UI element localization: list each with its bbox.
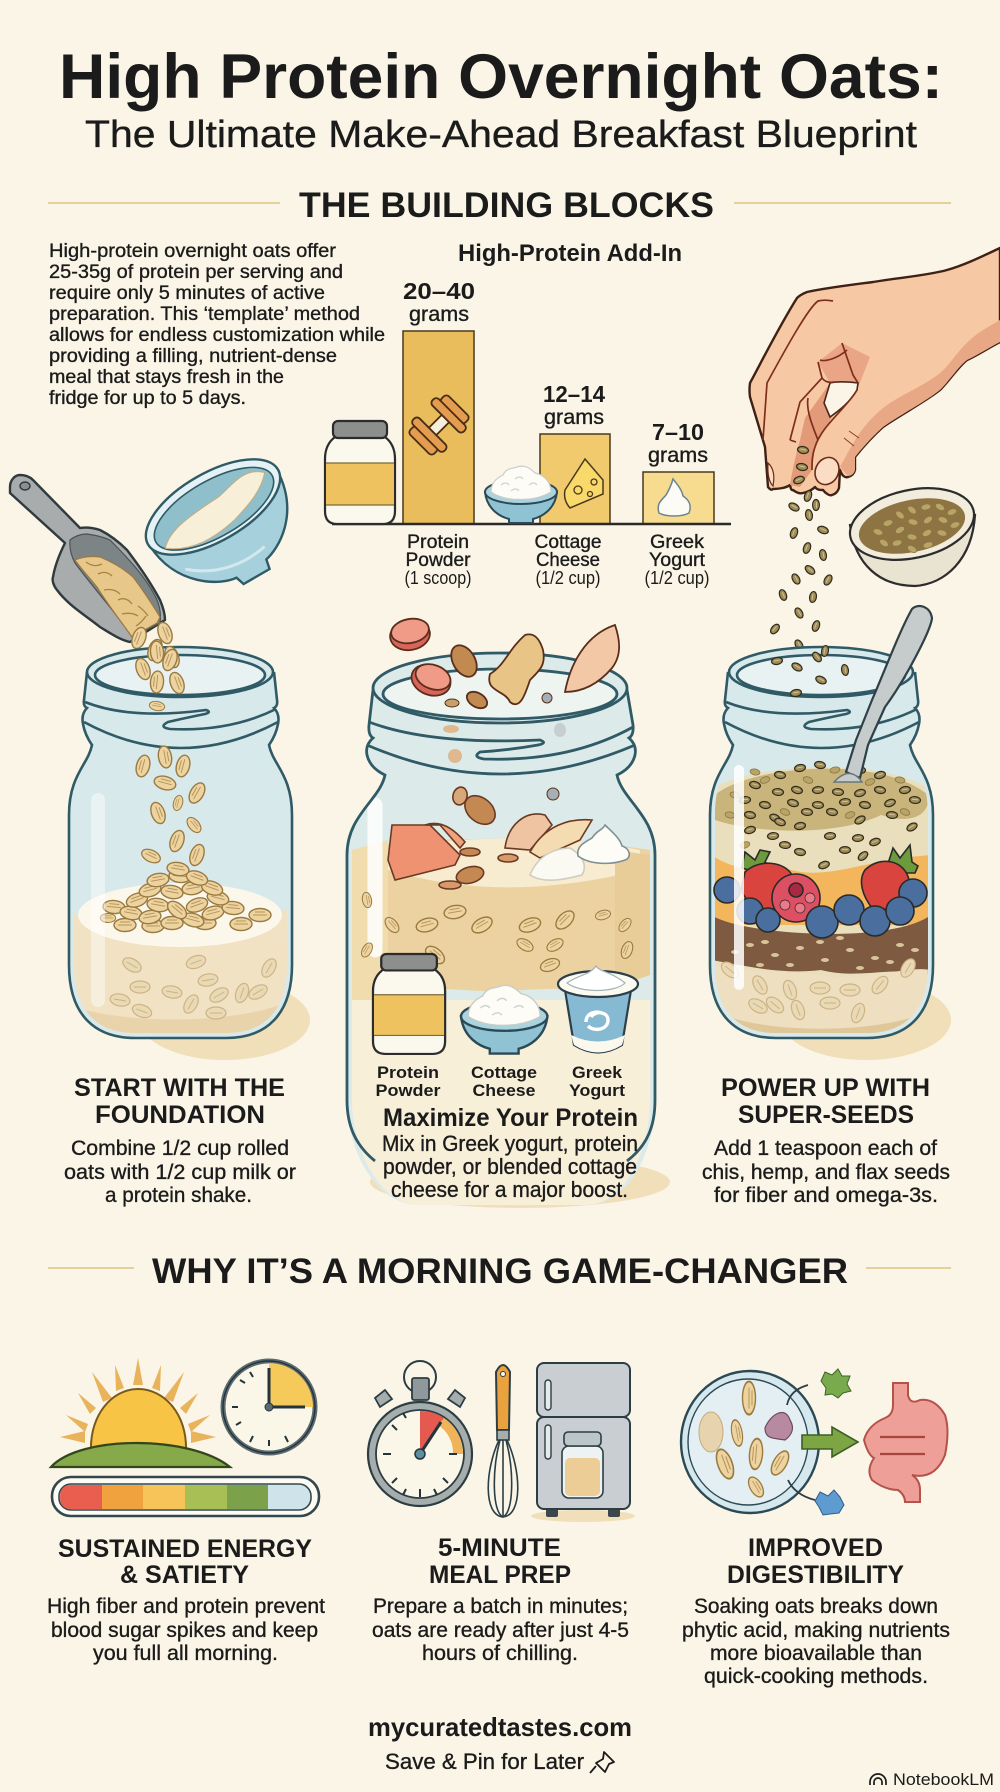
step 1 text: START WITH THE [74, 1074, 285, 1102]
text: maximize your protein: Mix in Greek yogurt, protein [382, 1131, 638, 1156]
footer [368, 1712, 632, 1774]
title: The Ultimate Make-Ahead Breakfast Blueprint [85, 114, 917, 156]
seed layer [725, 761, 921, 870]
falling seeds [769, 490, 834, 651]
oat pile [100, 861, 271, 932]
category labels: Yogurt [649, 550, 706, 571]
benefit 2 text: MEAL PREP [429, 1561, 571, 1589]
jar 1: foundation [69, 647, 292, 1040]
bar: cottage cheese [540, 434, 610, 524]
bar chart: high-protein add-in [325, 240, 731, 588]
falling oats [133, 637, 208, 868]
intro paragraph: preparation. This ‘template’ method [49, 303, 360, 325]
footer: Save & Pin for Later [385, 1749, 584, 1774]
icon: pin [590, 1752, 614, 1773]
icon: protein jar [325, 421, 395, 524]
value labels [403, 278, 708, 467]
benefit 1 text: SUSTAINED ENERGY [58, 1535, 312, 1563]
benefit 3 text: more bioavailable than [710, 1641, 922, 1665]
illustration: hand sprinkling seeds [750, 248, 1000, 495]
step 1 text: Combine 1/2 cup rolled [71, 1136, 289, 1160]
value labels: grams [648, 444, 708, 467]
step 1 text: FOUNDATION [95, 1101, 265, 1129]
text: maximize your protein [382, 1104, 638, 1202]
step 1 text: a protein shake. [105, 1183, 252, 1207]
benefit 3 text: DIGESTIBILITY [727, 1561, 904, 1589]
icon: yogurt cup [558, 966, 638, 1052]
value labels: 12–14 [543, 381, 605, 407]
icon: cottage cheese bowl [461, 985, 547, 1054]
jar outline and neck [710, 647, 933, 1038]
benefit 2 text: oats are ready after just 4-5 [372, 1618, 629, 1642]
glass body [347, 690, 655, 1205]
icon: clock [223, 1361, 315, 1453]
icon: protein powder jar [373, 954, 445, 1054]
step 3 text: SUPER-SEEDS [738, 1101, 914, 1129]
benefit 3 text [682, 1534, 950, 1688]
jar shadows [140, 980, 951, 1208]
axis [332, 523, 731, 525]
category labels: (1/2 cup) [644, 568, 710, 588]
glass highlight [368, 805, 382, 950]
benefit 3 text: phytic acid, making nutrients [682, 1618, 950, 1642]
intro paragraph: meal that stays fresh in the [49, 366, 284, 388]
title [59, 42, 943, 156]
icon: germ connectors and microbes [787, 1369, 851, 1515]
icon: stopwatch [368, 1361, 472, 1506]
step 3 text [702, 1074, 950, 1207]
arrow [802, 1427, 858, 1457]
oat and milk layer [70, 883, 292, 1040]
jar labels: Greek [572, 1063, 623, 1082]
benefit 1 text [47, 1535, 325, 1665]
glass highlights [91, 800, 105, 1000]
jar 3: super-seeds [710, 606, 933, 1040]
value labels: grams [544, 406, 604, 429]
value labels: 20–40 [403, 278, 475, 304]
bar: greek yogurt [643, 472, 714, 524]
icon: whisk [488, 1365, 518, 1517]
category labels: (1 scoop) [404, 568, 472, 588]
intro paragraph: providing a filling, nutrient-dense [49, 345, 337, 367]
intro paragraph: fridge for up to 5 days. [49, 387, 246, 409]
title: High Protein Overnight Oats: [59, 42, 943, 112]
fruit layer [714, 845, 927, 938]
benefit 1 text: blood sugar spikes and keep [51, 1618, 318, 1642]
category labels: Powder [406, 550, 471, 571]
icon: rising sun [51, 1358, 230, 1467]
category labels [404, 532, 710, 588]
layers [711, 767, 931, 1040]
bar: protein powder [403, 331, 474, 524]
falling protein toppings [388, 616, 619, 800]
step 1 text: oats with 1/2 cup milk or [64, 1160, 296, 1184]
spoon [834, 606, 932, 782]
step 1 text [64, 1074, 296, 1207]
salmon and toppings [388, 785, 629, 889]
glass body [69, 672, 292, 1038]
category labels: Greek [650, 532, 705, 553]
intro paragraph: High-protein overnight oats offer [49, 240, 337, 262]
jar outline and neck [69, 647, 292, 1038]
illustration: scoop of oats [10, 475, 175, 651]
seeds entering jar [771, 645, 849, 697]
benefit 3 text: quick-cooking methods. [704, 1664, 928, 1688]
benefit 2 text: 5-MINUTE [438, 1534, 561, 1562]
intro paragraph: allows for endless customization while [49, 324, 385, 346]
glass body [710, 672, 933, 1038]
flax specks [731, 936, 919, 970]
jar 2: protein [347, 616, 660, 1210]
jar outline and neck [347, 653, 655, 1161]
text: maximize your protein: Maximize Your Protein [383, 1104, 638, 1132]
step 3 text: for fiber and omega-3s. [714, 1183, 938, 1207]
icon: fridge with jar [531, 1363, 635, 1522]
benefit 3 text: IMPROVED [748, 1534, 883, 1562]
category labels: Protein [407, 532, 469, 553]
notebooklm mark: NotebookLM [893, 1770, 994, 1789]
oats layer [347, 839, 660, 1210]
illustration: bowl of milk [131, 440, 319, 616]
icon: bowl of seeds [843, 478, 981, 586]
icon: stomach and intestine [864, 1383, 948, 1502]
benefit 2 text: hours of chilling. [422, 1641, 578, 1665]
intro paragraph: require only 5 minutes of active [49, 282, 325, 304]
jar labels: Cheese [472, 1081, 536, 1100]
icon: cottage cheese bowl [485, 466, 557, 523]
glass highlight [734, 770, 744, 985]
category labels: Cheese [536, 550, 600, 571]
jar labels: Yogurt [569, 1081, 625, 1100]
heading: why it's a morning game-changer: WHY IT’S A MORNING GAME-CHANGER [152, 1252, 848, 1291]
text: maximize your protein: cheese for a major boost. [391, 1177, 628, 1202]
category labels: Cottage [534, 532, 602, 553]
category labels: (1/2 cup) [536, 568, 600, 588]
step 3 text: Add 1 teaspoon each of [714, 1136, 937, 1160]
oat flakes in layer [359, 892, 635, 974]
intro paragraph [49, 240, 385, 409]
benefit 3 text: Soaking oats breaks down [694, 1594, 938, 1618]
jar labels: Cottage [471, 1063, 537, 1082]
benefit 2 text: Prepare a batch in minutes; [373, 1594, 628, 1618]
value labels: 7–10 [652, 419, 704, 445]
step 3 text: chis, hemp, and flax seeds [702, 1160, 950, 1184]
icon: plate of soaking oats [681, 1371, 819, 1513]
intro paragraph: 25-35g of protein per serving and [49, 261, 343, 283]
icon: energy bar [52, 1477, 319, 1516]
jar labels [376, 1063, 625, 1100]
jar labels: Protein [377, 1063, 439, 1082]
benefit 1 text: & SATIETY [120, 1561, 249, 1589]
benefit 1 text: High fiber and protein prevent [47, 1594, 325, 1618]
bar chart: high-protein add-in: High-Protein Add-In [458, 240, 682, 267]
text: maximize your protein: powder, or blended cottage [383, 1154, 637, 1179]
footer: mycuratedtastes.com [368, 1712, 632, 1742]
step 3 text: POWER UP WITH [721, 1074, 930, 1102]
oat layer [718, 956, 918, 1024]
benefit 2 text [372, 1534, 629, 1665]
benefit 1 text: you full all morning. [93, 1641, 278, 1665]
value labels: grams [409, 303, 469, 326]
heading: the building blocks: THE BUILDING BLOCKS [299, 186, 714, 225]
jar labels: Powder [376, 1081, 441, 1100]
